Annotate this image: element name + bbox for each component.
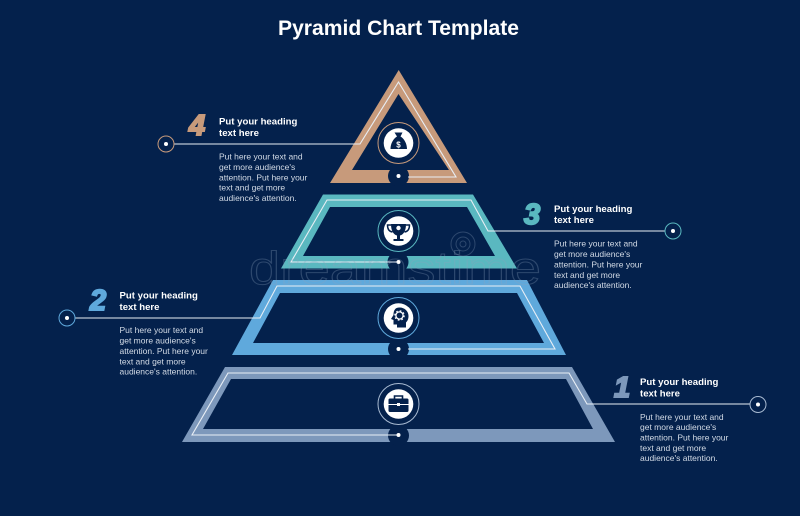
callout 1: 1 <box>614 372 630 404</box>
callout 3: Put here your text and <box>554 238 638 248</box>
callout 1: get more audience's <box>640 422 716 432</box>
callout 4: text here <box>219 128 259 139</box>
callout 2 <box>59 285 208 376</box>
callout 4: get more audience's <box>219 162 295 172</box>
callout 2: get more audience's <box>120 336 196 346</box>
callout 1 <box>614 372 766 463</box>
callout 3 <box>524 199 681 290</box>
callout 1: Put your heading <box>640 377 718 388</box>
watermark <box>249 232 541 294</box>
callout 2: 2 <box>89 285 106 317</box>
callout 3: text and get more <box>554 270 620 280</box>
callout 1: audience's attention. <box>640 453 718 463</box>
callout 3: 3 <box>524 199 540 231</box>
callout 3: get more audience's <box>554 249 630 259</box>
callout 4: 4 <box>188 110 205 142</box>
pyramid level 2: blue trapezoid <box>67 280 566 360</box>
callout 4: text and get more <box>219 182 285 192</box>
title: Pyramid Chart Template <box>278 17 519 40</box>
icon: money bag: $ <box>396 140 401 150</box>
pyramid level 1: slate trapezoid <box>182 367 758 446</box>
icon: head with gear <box>378 298 419 338</box>
callout 2: Put your heading <box>120 290 198 302</box>
icon: briefcase <box>378 384 419 424</box>
callout 4: Put here your text and <box>219 152 303 162</box>
callout 3: text here <box>554 215 594 226</box>
callout 4: Put your heading <box>219 116 297 128</box>
icon: trophy <box>378 210 419 252</box>
callout 2: attention. Put here your <box>120 346 208 356</box>
callout 4: audience's attention. <box>219 193 297 203</box>
watermark: dreamstime <box>249 242 541 294</box>
callout 1: attention. Put here your <box>640 432 729 442</box>
callout 2: text and get more <box>120 356 186 366</box>
callout 1: Put here your text and <box>640 412 724 422</box>
callout 3: Put your heading <box>554 204 632 215</box>
pyramid level 3: teal trapezoid <box>281 194 673 272</box>
callout 2: Put here your text and <box>120 325 203 335</box>
callout 1: text here <box>640 388 680 400</box>
callout 4: attention. Put here your <box>219 172 308 182</box>
callout 2: text here <box>120 302 160 313</box>
callout 1: text and get more <box>640 443 706 453</box>
callout 3: audience's attention. <box>554 280 632 290</box>
callout 4 <box>158 110 308 203</box>
pyramid level 4: tan triangle <box>166 70 467 186</box>
icon: money bag <box>378 122 419 164</box>
callout 2: audience's attention. <box>120 366 197 376</box>
callout 3: attention. Put here your <box>554 260 643 270</box>
